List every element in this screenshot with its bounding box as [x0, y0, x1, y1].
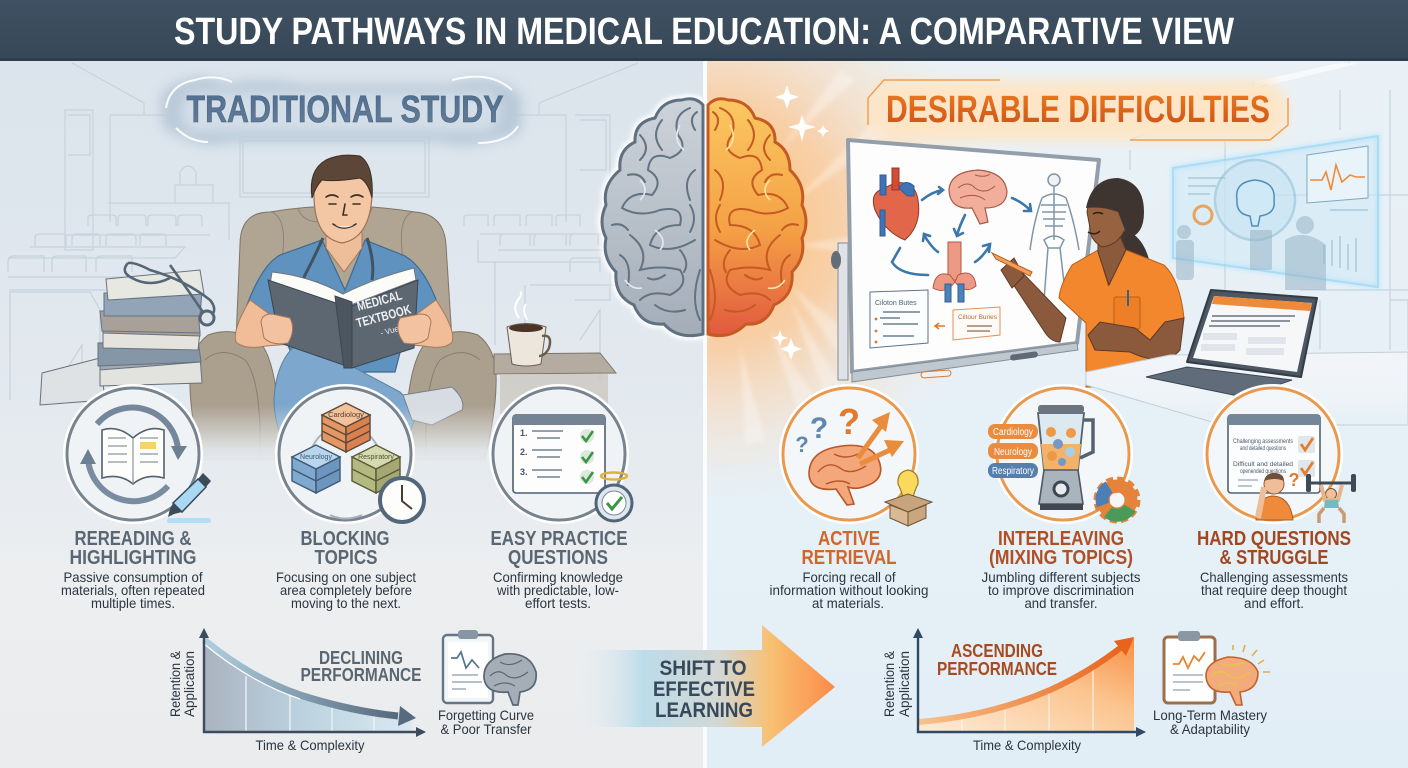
icon: grey brain hemisphere	[602, 99, 703, 336]
icon: assessment with struggling student and weightlifter: openended questions	[1240, 468, 1287, 475]
illustration: coffee mug on side table	[494, 292, 616, 414]
respiratory diagram	[933, 242, 976, 302]
title: STUDY PATHWAYS IN MEDICAL EDUCATION: A COMPARATIVE VIEW	[174, 11, 1234, 53]
header bar	[0, 0, 1408, 61]
hand and marker	[1001, 258, 1024, 288]
description: Confirming knowledge	[493, 569, 623, 585]
caption: long-term mastery	[1153, 707, 1267, 737]
chest pocket	[1114, 297, 1140, 329]
blender labels: Cardiology	[993, 427, 1033, 438]
heading: traditional study cloud	[160, 77, 523, 146]
icon: orange brain hemisphere	[708, 99, 806, 336]
hands	[261, 314, 293, 344]
chart annotation: DECLINING	[319, 648, 403, 668]
divider	[703, 60, 707, 768]
caption: forgetting curve	[438, 707, 534, 737]
left arm	[235, 300, 292, 347]
light rays from brain	[740, 70, 925, 445]
description: Forcing recall of	[802, 569, 896, 585]
description: Focusing on one subject	[276, 569, 416, 585]
x axis label: Time & Complexity	[256, 737, 364, 753]
icon: topic blocks with clock: Neurology	[300, 454, 332, 461]
note card left: Ciloton Butes	[875, 300, 917, 307]
heading: INTERLEAVING	[998, 528, 1124, 550]
axes	[204, 636, 420, 732]
y axis label: Application	[896, 651, 912, 717]
chart annotation	[300, 648, 422, 685]
description	[276, 569, 416, 611]
chart annotation: PERFORMANCE	[937, 659, 1057, 679]
chart annotation	[937, 641, 1057, 679]
icon: assessment with struggling student and weightlifter: Challenging assessments	[1233, 438, 1294, 445]
axes	[918, 636, 1140, 732]
y axis label	[167, 650, 197, 717]
illustration: stacked medical books and stethoscope	[40, 263, 214, 405]
description	[493, 569, 623, 611]
heading	[802, 528, 896, 569]
icon: brain with question marks and bulb: ?	[795, 432, 809, 457]
illustration: desk with tablet and keyboard	[1086, 290, 1408, 425]
heading: HARD QUESTIONS	[1197, 528, 1351, 550]
y axis label	[881, 650, 912, 717]
illustration: nurse instructor	[992, 178, 1184, 387]
chart annotation: PERFORMANCE	[300, 665, 422, 685]
description	[61, 569, 205, 611]
face	[1088, 212, 1103, 234]
description: that require deep thought	[1201, 582, 1347, 598]
caption: long-term mastery: & Adaptability	[1170, 721, 1250, 737]
icon: topic blocks with clock: Cardiology	[328, 410, 364, 419]
icon: brain with question marks and bulb: ?	[810, 412, 828, 445]
heading: traditional study cloud: TRADITIONAL STUDY	[186, 89, 504, 131]
icon: assessment with struggling student and weightlifter	[1206, 387, 1356, 523]
illustration: whiteboard with connected anatomy diagrams	[831, 140, 1099, 382]
head	[314, 170, 372, 243]
heading: BLOCKING	[300, 528, 390, 550]
raised arm	[1007, 268, 1066, 342]
sparkles around orange brain	[772, 85, 829, 360]
arrow: shift to effective learning: LEARNING	[655, 699, 753, 722]
head	[1087, 190, 1128, 247]
brain diagram	[949, 170, 1007, 224]
icon: assessment with struggling student and weightlifter: ?	[1288, 470, 1300, 490]
note card left	[870, 290, 928, 348]
description	[982, 569, 1140, 611]
note card right	[935, 307, 1000, 340]
book cover text: - Vue	[379, 324, 400, 338]
panel: blocking topics	[276, 387, 424, 611]
x axis label: Time & Complexity	[973, 737, 1081, 753]
arrow: shift to effective learning: EFFECTIVE	[653, 678, 755, 701]
description: effort tests.	[525, 595, 591, 611]
panel: hard questions and struggle	[1197, 387, 1356, 611]
heading	[300, 528, 390, 569]
neck	[1098, 236, 1126, 285]
panel: rereading and highlighting	[61, 387, 211, 611]
scrub top	[1059, 250, 1184, 387]
y axis label: Retention &	[881, 650, 897, 717]
heading: TOPICS	[314, 547, 378, 569]
fade under left illustrations	[0, 405, 702, 470]
description	[1200, 569, 1348, 611]
ponytail	[1120, 230, 1152, 280]
panel: easy practice questions	[490, 387, 632, 611]
y axis label: Retention &	[167, 650, 183, 717]
description: to improve discrimination	[988, 582, 1134, 598]
caption: long-term mastery: Long-Term Mastery	[1153, 707, 1267, 723]
description: Passive consumption of	[64, 569, 203, 585]
icon: checklist with badge: 1.	[520, 428, 528, 438]
note card right: Ciltour Buries	[958, 314, 998, 321]
description: multiple times.	[91, 595, 175, 611]
chart: declining performance	[167, 628, 426, 753]
stethoscope around neck	[304, 238, 373, 283]
open textbook	[268, 268, 418, 368]
pants	[274, 342, 418, 460]
panel: active retrieval	[770, 387, 932, 611]
heading	[1197, 528, 1351, 569]
curved diagram arrows	[892, 187, 1031, 275]
heading: (MIXING TOPICS)	[989, 547, 1133, 569]
heart diagram	[873, 168, 919, 240]
icon: assessment with struggling student and weightlifter: and detailed questions	[1240, 445, 1287, 452]
armchair	[190, 206, 496, 460]
description: moving to the next.	[291, 595, 401, 611]
skeleton diagram	[1030, 174, 1079, 300]
arrow: shift to effective learning	[579, 625, 835, 747]
description: area completely before	[280, 582, 412, 598]
heading: HIGHLIGHTING	[70, 547, 196, 569]
book cover text: MEDICAL	[355, 287, 404, 314]
scrubs torso	[247, 240, 438, 372]
heading	[490, 528, 628, 569]
icon: brain with question marks and bulb	[782, 387, 932, 526]
hair	[311, 155, 372, 198]
heading	[70, 528, 196, 569]
description: at materials.	[812, 595, 884, 611]
heading: REREADING &	[74, 528, 192, 550]
icon: clipboard with glowing brain	[1164, 631, 1270, 705]
right arm	[398, 300, 453, 347]
lower arm	[1088, 318, 1184, 360]
description: Jumbling different subjects	[982, 569, 1140, 585]
icon: checklist with badge: 3.	[520, 467, 528, 477]
hair	[1086, 178, 1144, 238]
description: information without looking	[770, 582, 928, 598]
description: materials, often repeated	[61, 582, 205, 598]
illustration: hologram display	[1173, 136, 1378, 290]
neck	[326, 225, 362, 272]
icon: book with highlighter	[66, 387, 211, 523]
illustration: student reading in armchair	[190, 155, 496, 460]
heading: & STRUGGLE	[1220, 547, 1328, 569]
shoe	[403, 387, 463, 425]
icon: brain with question marks and bulb: ?	[838, 401, 860, 442]
caption: forgetting curve: Forgetting Curve	[438, 707, 534, 723]
icon: topic blocks with clock: Respiratory	[358, 454, 394, 461]
description	[770, 569, 928, 611]
chart annotation: ASCENDING	[951, 641, 1043, 661]
panel: interleaving	[982, 387, 1140, 611]
description: with predictable, low-	[496, 582, 619, 598]
heading: desirable difficulties plate: DESIRABLE DIFFICULTIES	[886, 89, 1270, 131]
heading: QUESTIONS	[508, 547, 608, 569]
panel: desirable difficulties background	[704, 60, 1408, 768]
blender labels: Neurology	[994, 447, 1032, 458]
panel: traditional study background	[0, 60, 704, 768]
arrow: shift to effective learning: SHIFT TO	[660, 657, 746, 680]
icon: blender mixing topics	[988, 387, 1138, 521]
blender labels	[988, 424, 1038, 478]
heading: ACTIVE	[818, 528, 880, 550]
icon: assessment with struggling student and weightlifter: Difficult and detailed	[1233, 461, 1293, 468]
heading: RETRIEVAL	[802, 547, 896, 569]
description: Challenging assessments	[1200, 569, 1348, 585]
book cover text	[350, 286, 416, 343]
y axis label: Application	[181, 651, 197, 717]
icon: clipboard with grey brain	[443, 630, 536, 705]
icon: topic blocks with clock	[278, 387, 424, 522]
description: and transfer.	[1024, 595, 1098, 611]
caption: forgetting curve: & Poor Transfer	[440, 721, 532, 737]
book cover text: TEXTBOOK	[355, 301, 413, 331]
heading: EASY PRACTICE	[490, 528, 628, 550]
heading: desirable difficulties plate	[868, 80, 1288, 141]
icon: checklist with badge: 2.	[520, 447, 528, 457]
icon: checklist with badge	[492, 387, 632, 521]
description: and effort.	[1244, 595, 1304, 611]
gear	[1096, 479, 1138, 521]
chart: ascending performance	[881, 628, 1146, 753]
blender labels: Respiratory	[992, 466, 1034, 477]
face features	[326, 195, 363, 228]
heading	[989, 528, 1133, 569]
